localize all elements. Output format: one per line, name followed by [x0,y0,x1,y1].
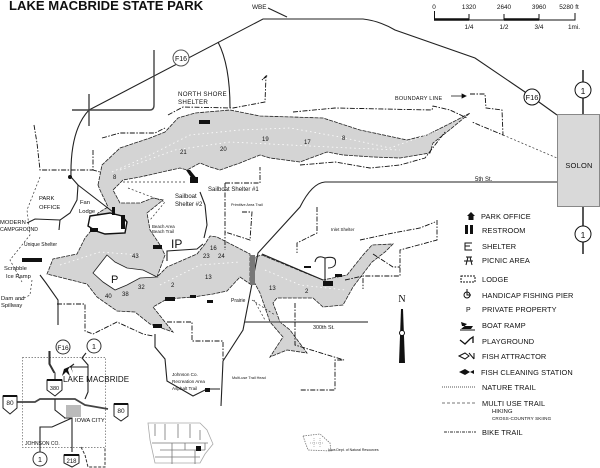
legend: bike trail [444,428,523,437]
iowa county map [148,423,213,464]
depth numbers: 32 [138,285,145,291]
town: Solon [558,114,600,206]
map labels: Fan [80,200,90,206]
map labels: SHELTER [178,99,208,106]
scale bar: 1mi. [568,24,580,31]
legend: multi use trail: MULTI USE TRAIL [482,399,545,408]
legend: playground: PLAYGROUND [482,337,534,346]
map labels: WBE [252,4,267,11]
legend [442,212,574,437]
map labels: Lodge [79,209,95,215]
map labels: Beach Area [152,224,175,229]
shield: 380: 380 [50,386,59,392]
facilities: dark marks [22,120,342,392]
highway shield: 1 north: 1 [581,86,586,96]
legend: multi use trail [442,399,552,421]
roads [27,8,557,406]
legend: restroom [465,225,526,235]
map labels: Ice Ramp [6,274,31,280]
north arrow: N [398,294,406,305]
legend: lodge [461,275,508,284]
scale bar: 3960 [532,4,547,11]
legend: boat ramp [460,321,526,330]
scale bar [432,4,580,31]
map labels: Asphalt Trail [172,386,197,391]
inset locator map [3,339,129,467]
small state outline and credit: Iowa Dept. of Natural Resources [328,448,379,452]
depth numbers: 24 [218,254,225,260]
map labels: Johnson Co. [172,372,198,377]
highway shield: F18 [524,89,540,105]
small state outline and credit [303,434,379,452]
legend: handicap fishing pier: HANDICAP FISHING PIER [482,291,574,300]
legend: picnic area: PICNIC AREA [482,256,530,265]
map labels: Multi-use Trail Head [232,376,266,380]
highway shield: 1 south: 1 [581,230,586,240]
map labels: Primitive Area Trail [231,203,263,207]
legend: handicap fishing pier [464,289,574,300]
highway 1 and causeway [582,70,584,254]
depth numbers: 13 [205,275,212,281]
legend: park office: PARK OFFICE [481,212,531,221]
highway shield: F18: F16 [526,93,538,102]
boundary line arrow [451,94,466,98]
legend: nature trail [442,383,536,392]
scale bar: 1320 [462,4,477,11]
legend: nature trail: NATURE TRAIL [482,383,536,392]
legend: fish cleaning station: FISH CLEANING STATION [481,368,573,377]
depth numbers: 19 [262,137,269,143]
map labels: Sailboat Shelter #1 [208,187,259,193]
depth numbers: 8 [342,136,346,142]
map labels: OFFICE [39,205,60,211]
map labels [0,4,493,391]
scale bar: 2640 [497,4,512,11]
map labels: PARK [39,196,54,202]
scale bar: 5280 ft [559,4,579,11]
lake: gray water body [47,110,470,357]
depth numbers: 2 [305,289,309,295]
depth numbers: 40 [105,294,112,300]
depth numbers: 13 [269,286,276,292]
shield: F16: F16 [57,345,69,352]
map labels: Sailboat [175,194,197,200]
road: 300th St [245,321,368,323]
depth numbers [105,136,346,300]
highway shield: 1 north [575,82,591,98]
map labels: 300th St. [313,325,335,331]
map labels: Spillway [1,303,22,309]
trail: dashed [10,135,557,320]
legend: multi use trail: HIKING [492,409,513,415]
depth numbers: 38 [122,292,129,298]
town: Solon: SOLON [565,161,593,170]
map labels: Unique Shelter [24,242,57,248]
legend: lodge: LODGE [482,275,508,284]
scale bar: 3/4 [535,24,544,31]
scale bar: 1/2 [500,24,509,31]
legend: multi use trail: CROSS-COUNTRY SKIING [492,416,552,421]
map labels: Scrabble [4,266,27,272]
map labels: NORTH SHORE [178,91,227,98]
map labels: Inlet Shelter [331,227,355,232]
road cross [72,50,154,126]
map labels: Dam and [1,296,25,302]
depth numbers: 8 [113,175,117,181]
road: 5th St [221,182,557,406]
park boundary [34,75,503,390]
map labels: Prairie [231,298,246,304]
inset locator map: LAKE MACBRIDE [63,375,129,384]
shield: 218: 218 [66,459,77,465]
label: IP: IP [171,237,182,251]
map labels: MODERN [0,220,26,226]
scale bar: 0 [432,4,436,11]
inset locator map: JOHNSON CO. [25,441,60,447]
depth numbers: 20 [220,147,227,153]
depth numbers: 43 [132,254,139,260]
map labels: Shelter #2 [175,202,203,208]
inset locator map: IOWA CITY [75,418,105,424]
highway shield: 1 south [575,226,591,242]
legend: shelter: SHELTER [482,242,516,251]
land peninsula: Fan Lodge [88,213,127,234]
depth numbers: 16 [210,246,217,252]
legend: fish attractor: FISH ATTRACTOR [482,352,546,361]
legend: boat ramp: BOAT RAMP [482,321,526,330]
legend: restroom: RESTROOM [482,226,526,235]
shield: 80 west: 80 [6,400,14,407]
map labels: BOUNDARY LINE [395,96,442,102]
scale bar: 1/4 [465,24,474,31]
highway shield: F16 [173,50,189,66]
causeway [250,255,255,285]
depth numbers: 23 [203,254,210,260]
depth numbers: 17 [304,140,311,146]
depth numbers: 21 [180,150,187,156]
road: F16 [89,19,557,115]
map labels: 5th St. [475,177,493,183]
north arrow [398,294,406,363]
land peninsula: P [93,255,157,290]
highway shield: F16: F16 [175,56,187,63]
map labels: Recreation Area [172,379,205,384]
shield: 1 south: 1 [38,455,42,464]
legend: private property: P [466,307,471,314]
map labels: CAMPGROUND [0,227,38,233]
shield: 80 east: 80 [117,408,125,415]
depth numbers: 2 [171,283,175,289]
legend: private property: PRIVATE PROPERTY [482,305,557,314]
map labels: Beach Trail [152,229,174,234]
legend: bike trail: BIKE TRAIL [482,428,523,437]
depth contours [60,128,440,290]
legend: shelter [465,242,516,251]
label: P: P [111,274,118,286]
shield: 1: 1 [92,342,96,351]
